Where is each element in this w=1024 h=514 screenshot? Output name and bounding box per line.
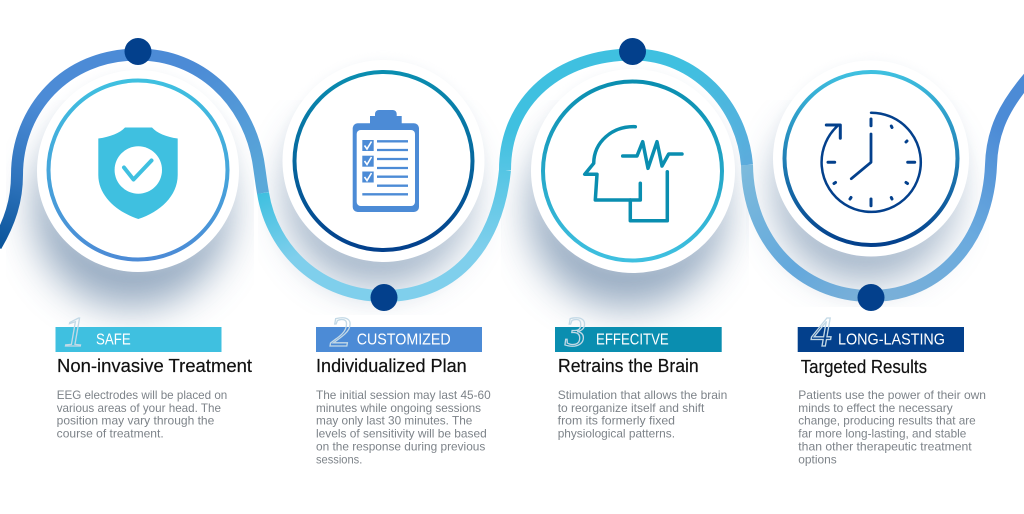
banner: LONG-LASTING	[798, 310, 964, 356]
body: step 1 description: various areas of your head. The	[57, 401, 221, 415]
body: step 1 description: EEG electrodes will be placed on	[57, 388, 227, 402]
body: step 3 description	[558, 388, 727, 441]
step 3 medallion: head with brainwave	[531, 69, 735, 273]
banner: EFFECITVE: EFFECITVE	[596, 332, 669, 348]
banner: SAFE: SAFE	[96, 332, 131, 348]
body: step 2 description: levels of sensitivity will be based	[316, 427, 487, 441]
heading: Retrains the Brain: Retrains the Brain	[558, 356, 699, 376]
drop shadows under circles	[34, 102, 955, 308]
body: step 2 description: The initial session may last 45-60	[316, 388, 491, 402]
heading: Non-invasive Treatment: Non-invasive Treatment	[57, 356, 252, 376]
body: step 4 description: minds to effect the necessary	[798, 401, 953, 415]
body: step 2 description: minutes while ongoing sessions	[316, 401, 481, 415]
body: step 1 description: course of treatment.	[57, 427, 164, 441]
banner: LONG-LASTING: LONG-LASTING	[838, 332, 945, 348]
heading: Targeted Results: Targeted Results	[801, 357, 927, 377]
icon: head profile	[585, 127, 682, 221]
banner: SAFE	[56, 310, 222, 356]
banner: EFFECITVE: 3	[564, 310, 586, 356]
icon: clipboard checklist	[353, 110, 419, 212]
body: step 4 description: Patients use the power of their own	[798, 388, 986, 402]
step 1 text block	[56, 310, 252, 441]
banner: CUSTOMIZED: 2	[330, 310, 351, 356]
body: step 4 description: far more long-lasting, and stable	[798, 427, 967, 441]
body: step 2 description	[316, 388, 491, 467]
timeline node dots	[124, 38, 884, 311]
body: step 2 description: on the response during previous	[316, 440, 485, 454]
icon: shield with check	[98, 128, 178, 219]
step 3 text block	[555, 310, 727, 441]
body: step 4 description: than other therapeutic treatment	[798, 440, 972, 454]
heading: Individualized Plan: Individualized Plan	[316, 356, 467, 376]
body: step 3 description: from its formerly fixed	[558, 414, 675, 428]
body: step 3 description: Stimulation that allows the brain	[558, 388, 727, 402]
body: step 2 description: may only last 30 minutes. The	[316, 414, 473, 428]
body: step 3 description: to reorganize itself and shift	[558, 401, 705, 415]
step 2 text block	[316, 310, 491, 467]
banner: CUSTOMIZED: CUSTOMIZED	[357, 332, 451, 348]
banner: LONG-LASTING: 4	[811, 310, 832, 356]
icon: clock with arrow	[822, 113, 921, 212]
winding timeline path	[0, 54, 1024, 296]
body: step 4 description: options	[798, 453, 837, 467]
body: step 3 description: physiological patterns.	[558, 427, 675, 441]
banner: CUSTOMIZED	[316, 310, 482, 356]
step 4 text block	[798, 310, 986, 467]
body: step 2 description: sessions.	[316, 453, 362, 467]
body: step 4 description: change, producing results that are	[798, 414, 976, 428]
step 4 medallion: clock	[773, 60, 969, 256]
body: step 4 description	[798, 388, 986, 467]
banner: EFFECITVE	[555, 310, 722, 356]
body: step 1 description	[57, 388, 227, 441]
banner: SAFE: 1	[64, 310, 85, 356]
body: step 1 description: position may vary through the	[57, 414, 215, 428]
step 2 medallion: clipboard	[282, 60, 484, 262]
step 1 medallion: shield	[37, 70, 239, 272]
